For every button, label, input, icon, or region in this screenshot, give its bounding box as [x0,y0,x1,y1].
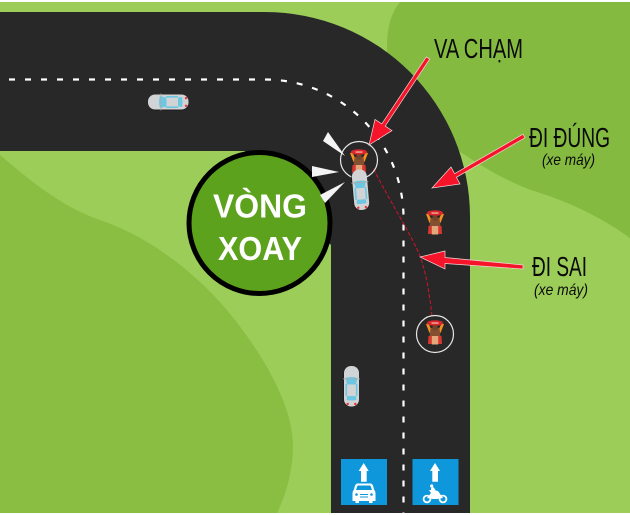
label: ĐI ĐÚNG: (xe máy) [542,152,595,169]
arrow to wrong path [420,251,523,269]
background: dark green patch lower left [0,155,293,513]
label: ĐI SAI [532,251,588,299]
label: ĐI SAI: (xe máy) [534,282,588,299]
motorbike correct lane [426,210,444,234]
road centre dashed line [0,80,404,515]
car in collision [350,169,371,211]
motorbike at collision [340,142,378,178]
label: VA CHẠM: VA CHẠM [434,33,523,64]
arrow to correct lane [432,134,525,188]
arrow to collision [369,57,430,145]
sign: motorbike lane [412,459,458,505]
collision impact marks [312,132,345,203]
label: ĐI ĐÚNG [529,122,610,169]
roundabout: VÒNG XOAY: VÒNG [213,188,307,224]
wrong-way path (red dashed) [373,168,432,316]
motorbike wrong start [416,316,454,352]
road [0,12,470,513]
background: dark green patch top right [387,2,630,238]
roundabout: VÒNG XOAY: XOAY [218,230,302,267]
label: ĐI SAI: ĐI SAI [532,251,587,282]
sign: car lane [341,459,387,505]
car on lower road [343,366,360,406]
car on top road [148,94,188,110]
roundabout: VÒNG XOAY [189,152,330,294]
